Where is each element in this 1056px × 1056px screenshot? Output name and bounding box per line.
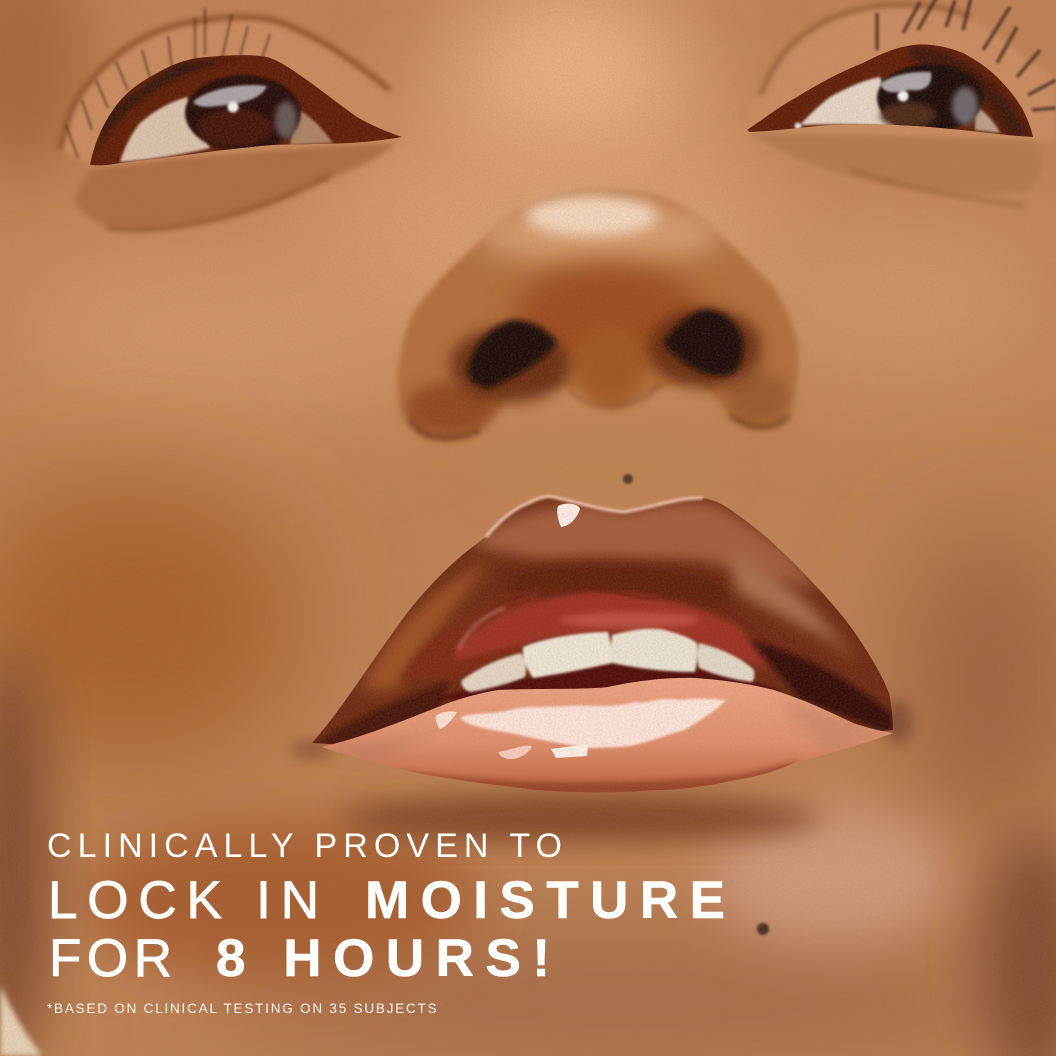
icon: lips	[290, 490, 912, 800]
iris	[185, 75, 301, 151]
lower lip gloss highlight	[460, 698, 726, 748]
lower lip gloss glints	[436, 711, 457, 729]
icon: right nostril	[663, 310, 743, 376]
iris	[877, 64, 983, 132]
icon: right eye	[740, 0, 1056, 206]
eye opening	[90, 55, 402, 166]
lower eyelid	[73, 143, 397, 228]
icon: left eye	[60, 8, 420, 230]
upper lip	[312, 496, 893, 744]
text: subheading: CLINICALLY PROVEN TO	[47, 827, 565, 865]
nose tip highlight	[526, 196, 658, 236]
text: headline line 2: 8 HOURS!	[216, 929, 553, 988]
icon: mole on chin	[757, 923, 769, 935]
upper lip gloss edge	[486, 497, 703, 537]
lower lip	[322, 678, 893, 792]
mouth interior	[435, 660, 790, 700]
gum band	[450, 592, 770, 670]
lower eyelid	[750, 128, 1042, 194]
dark right corner	[750, 640, 893, 735]
upper lip glint	[557, 504, 580, 527]
icon: nose	[397, 189, 798, 440]
eyelashes	[877, 0, 1056, 110]
eyelid crease	[760, 5, 970, 95]
text block: headline	[47, 827, 728, 1016]
eyelashes	[66, 8, 270, 158]
eyelid crease	[60, 17, 390, 150]
icon: left nostril	[468, 320, 557, 388]
upper eyelid	[747, 5, 1056, 140]
text: headline line 1: MOISTURE	[365, 871, 728, 930]
text: footnote: *BASED ON CLINICAL TESTING ON 35 SUBJECTS	[47, 1001, 438, 1016]
eye opening	[747, 44, 1033, 137]
text: headline line 2: FOR	[49, 929, 177, 988]
icon: mole above lip	[623, 474, 633, 484]
text: headline line 1: LOCK IN	[48, 871, 324, 930]
upper eyelid	[60, 17, 402, 165]
sclera	[800, 77, 895, 127]
sclera	[120, 97, 210, 162]
teeth	[461, 629, 754, 692]
text: headline line 2	[49, 929, 553, 988]
text: headline line 1	[48, 871, 728, 930]
